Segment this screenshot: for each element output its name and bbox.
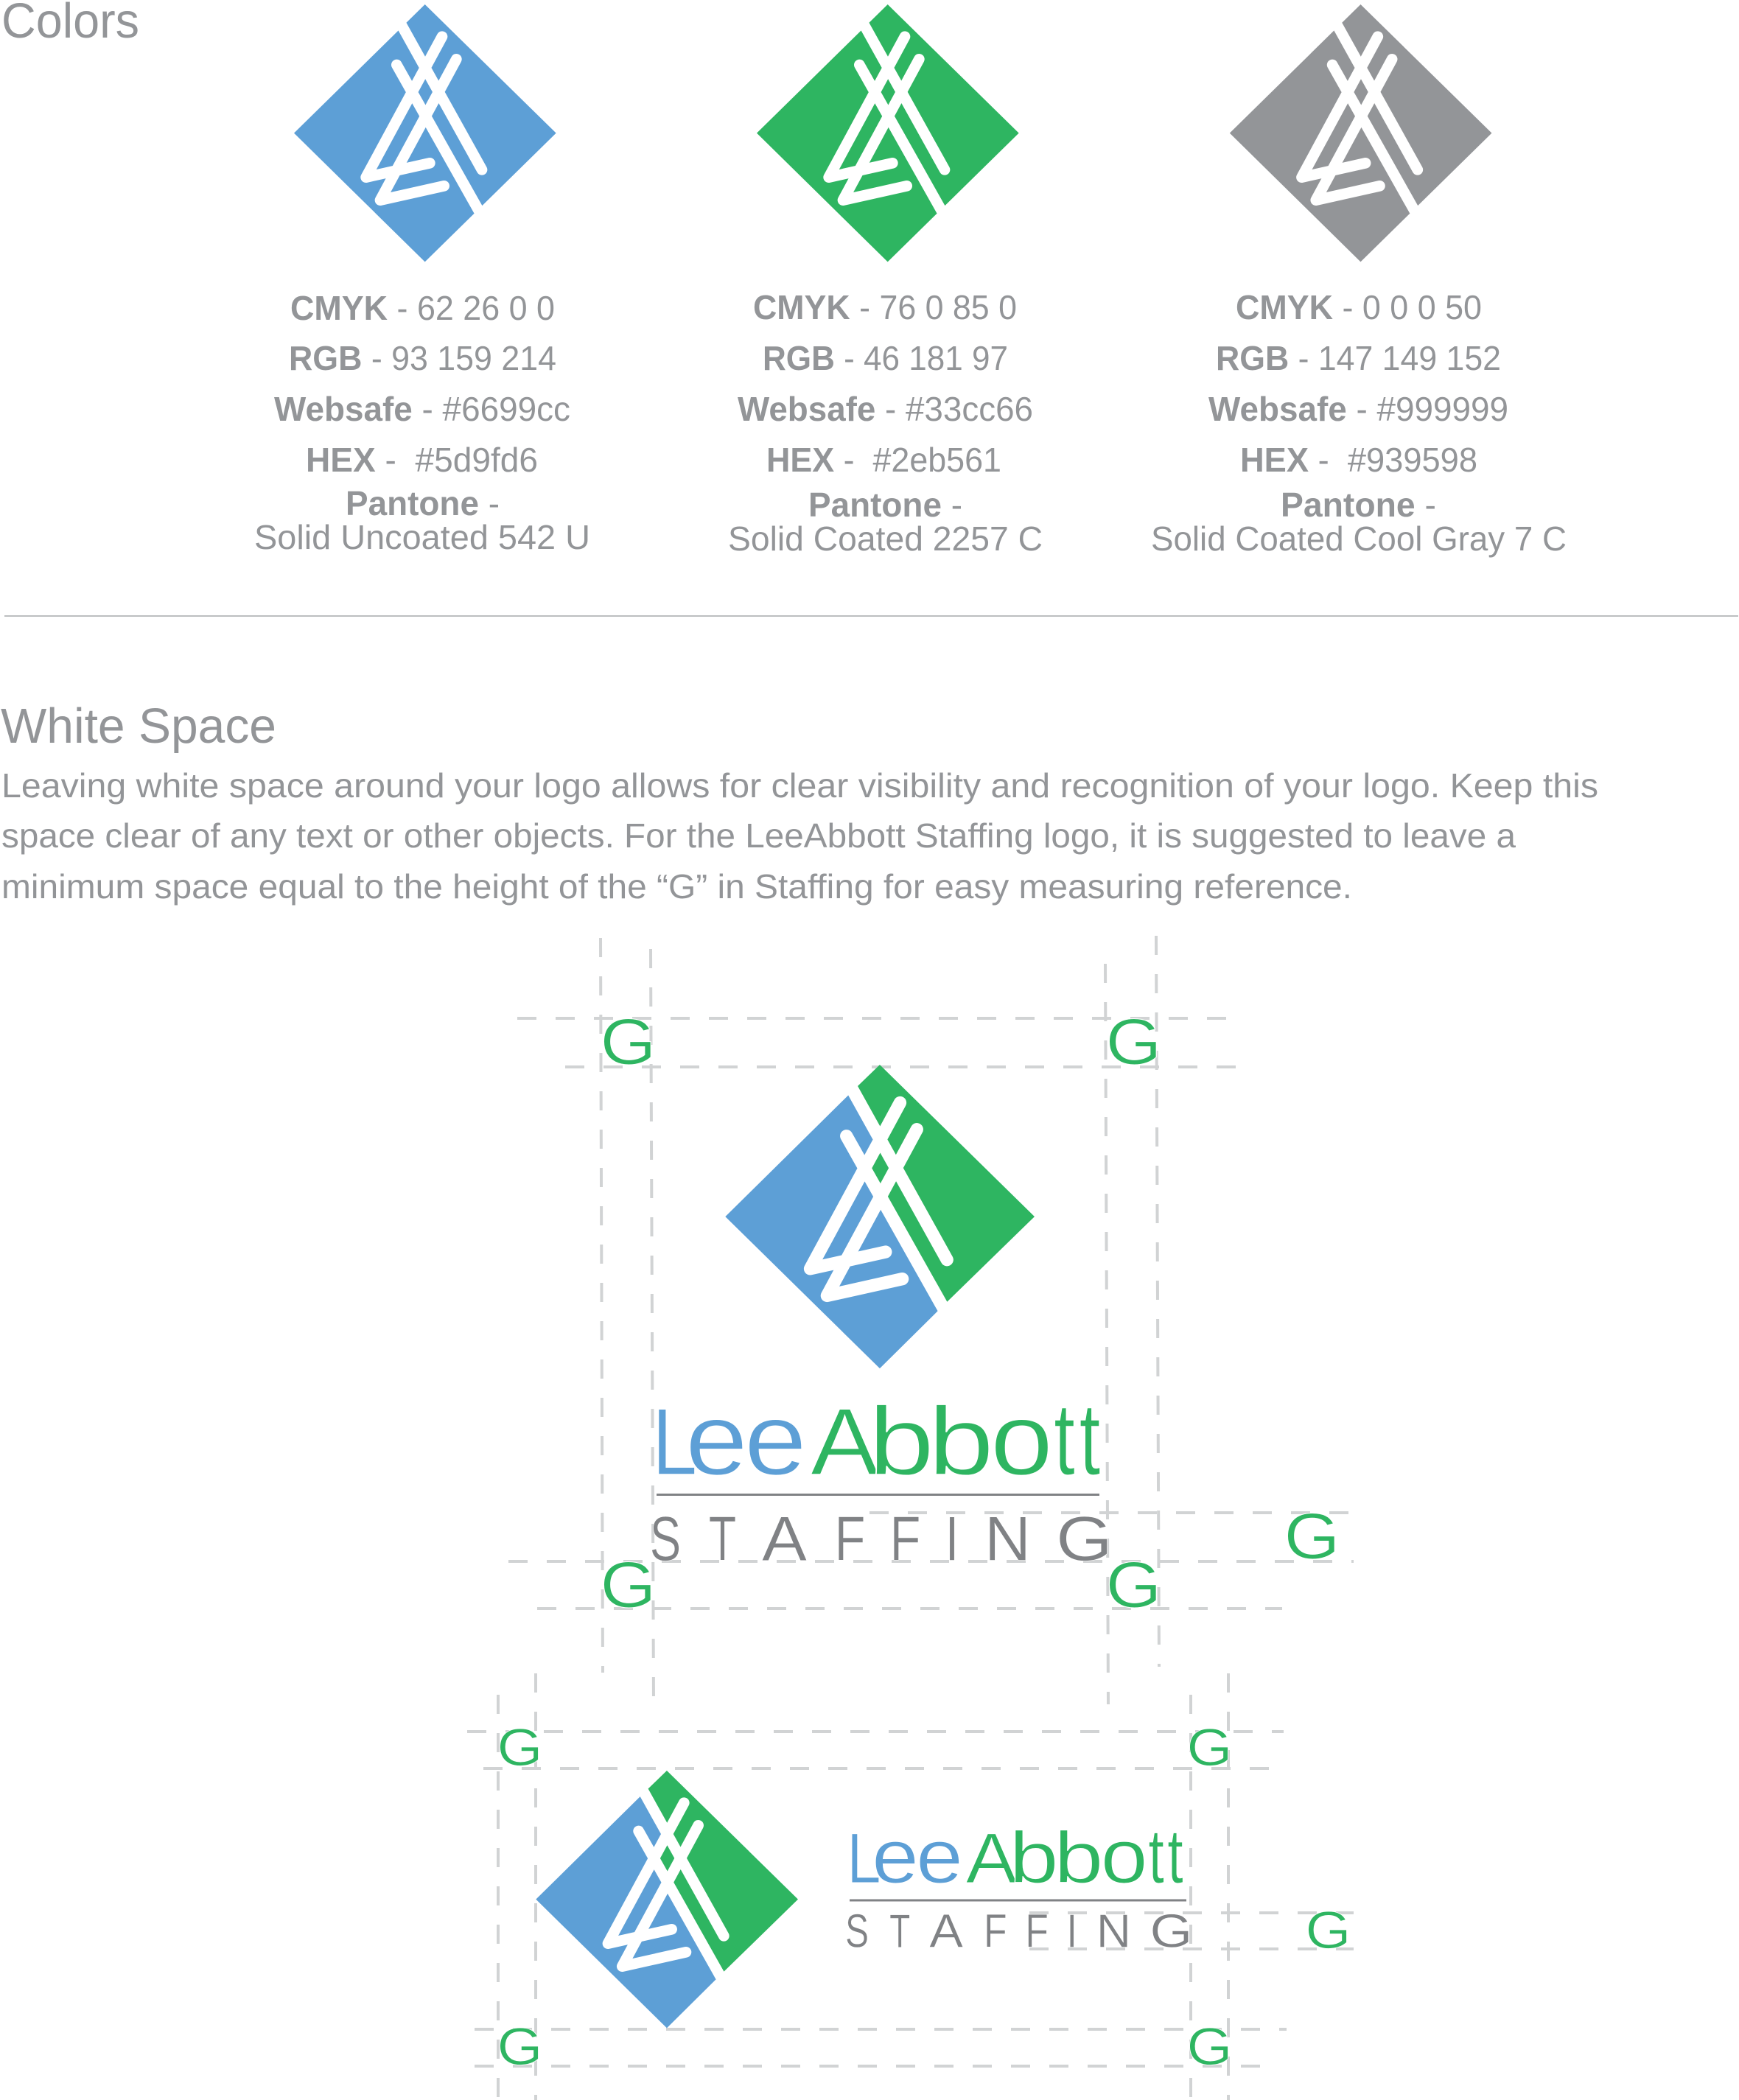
color specs: green: RGB - 46 181 97 xyxy=(763,339,1008,377)
wordmark: STAFFING xyxy=(845,1905,1192,1958)
color specs: blue: Websafe - #6699cc xyxy=(274,390,570,428)
color specs: blue: Solid Uncoated 542 U xyxy=(254,518,590,556)
color specs: blue: Pantone - xyxy=(346,484,500,522)
color specs: gray: Pantone - xyxy=(1281,486,1436,524)
wordmark: LeeAbbott: t xyxy=(1148,1813,1164,1900)
wordmark: STAFFING: I xyxy=(1067,1905,1077,1958)
wordmark: STAFFING: T xyxy=(709,1505,736,1575)
wordmark: STAFFING: N xyxy=(984,1505,1031,1575)
wordmark: STAFFING: F xyxy=(984,1905,1007,1958)
panel: vertical logo clear space diagram xyxy=(508,936,1354,1704)
clear space G markers: G xyxy=(497,2018,542,2076)
color specs: blue xyxy=(254,289,590,556)
wordmark: STAFFING: F xyxy=(890,1505,921,1575)
wordmark: STAFFING: F xyxy=(834,1505,865,1575)
color specs: gray xyxy=(1151,288,1567,558)
clear space G markers xyxy=(600,1005,1340,1621)
clear space G markers: G xyxy=(600,1548,656,1621)
panel: white space text xyxy=(1,699,1598,906)
color specs: blue: HEX - #5d9fd6 xyxy=(306,441,538,479)
wordmark: LeeAbbott: L xyxy=(847,1818,881,1898)
logo mark: blue xyxy=(294,4,556,262)
logo mark: two color xyxy=(536,1771,798,2028)
paragraph: white space explanation: Leaving white space around your logo allows for clear visibility and recognition of your logo. Keep this xyxy=(1,766,1598,805)
wordmark: LeeAbbott: t xyxy=(1079,1381,1101,1497)
color specs: green: CMYK - 76 0 85 0 xyxy=(753,288,1017,326)
panel: colors section xyxy=(1,0,1567,558)
color specs: gray: HEX - #939598 xyxy=(1240,441,1477,479)
color specs: green: HEX - #2eb561 xyxy=(766,441,1001,479)
color specs: green: Websafe - #33cc66 xyxy=(738,390,1033,428)
color specs: gray: Websafe - #999999 xyxy=(1208,390,1508,428)
wordmark: LeeAbbott: b xyxy=(1010,1817,1059,1898)
clear space G markers: G xyxy=(600,1005,656,1078)
wordmark: LeeAbbott: o xyxy=(1101,1814,1148,1900)
dashed guides xyxy=(467,1673,1354,2100)
color specs: blue: RGB - 93 159 214 xyxy=(289,339,556,377)
clear space G markers: G xyxy=(1186,2018,1232,2076)
paragraph: white space explanation xyxy=(1,766,1598,906)
color specs: green: Pantone - xyxy=(808,486,962,524)
wordmark: LeeAbbott: A xyxy=(811,1389,879,1495)
wordmark: STAFFING xyxy=(650,1505,1113,1575)
panel: horizontal logo clear space diagram xyxy=(467,1673,1354,2100)
clear space G markers: G xyxy=(1186,1719,1232,1777)
paragraph: white space explanation: space clear of any text or other objects. For the LeeAbbott Staffing logo, it is suggested to leave a xyxy=(1,816,1516,855)
wordmark: LeeAbbott: A xyxy=(966,1818,1018,1898)
wordmark: LeeAbbott xyxy=(847,1813,1183,1900)
clear space G markers: G xyxy=(1284,1499,1340,1572)
color specs: gray: CMYK - 0 0 0 50 xyxy=(1236,288,1482,326)
wordmark: STAFFING: I xyxy=(945,1505,959,1575)
logo mark: gray xyxy=(1230,4,1491,262)
dashed guides xyxy=(508,936,1354,1704)
color specs: green: Solid Coated 2257 C xyxy=(728,519,1043,558)
wordmark: LeeAbbott: t xyxy=(1054,1381,1075,1497)
clear space G markers: G xyxy=(1306,1902,1351,1960)
clear space G markers: G xyxy=(497,1719,542,1777)
color specs: gray: Solid Coated Cool Gray 7 C xyxy=(1151,519,1567,558)
heading: White Space: White Space xyxy=(1,699,276,754)
wordmark: LeeAbbott: o xyxy=(990,1382,1053,1497)
color specs: blue: CMYK - 62 26 0 0 xyxy=(290,289,555,327)
wordmark: STAFFING: T xyxy=(889,1905,910,1958)
wordmark: LeeAbbott: b xyxy=(1054,1817,1104,1898)
wordmark: LeeAbbott: e xyxy=(744,1382,807,1497)
wordmark: STAFFING: G xyxy=(1056,1505,1113,1575)
logo mark: green xyxy=(757,4,1019,262)
wordmark: STAFFING: G xyxy=(1150,1905,1192,1958)
wordmark: LeeAbbott xyxy=(651,1381,1101,1497)
logo mark: two color xyxy=(725,1065,1035,1368)
wordmark: STAFFING: F xyxy=(1025,1905,1049,1958)
wordmark: STAFFING: N xyxy=(1096,1905,1131,1958)
wordmark: STAFFING: S xyxy=(650,1505,681,1575)
wordmark: LeeAbbott: L xyxy=(651,1389,697,1495)
clear space G markers: G xyxy=(1105,1005,1161,1078)
wordmark: STAFFING: A xyxy=(762,1505,807,1575)
wordmark: LeeAbbott: b xyxy=(928,1387,994,1495)
wordmark: LeeAbbott: e xyxy=(916,1814,963,1900)
wordmark: LeeAbbott: e xyxy=(685,1382,748,1497)
clear space G markers: G xyxy=(1105,1548,1161,1621)
paragraph: white space explanation: minimum space equal to the height of the “G” in Staffing for easy measuring reference. xyxy=(1,867,1352,906)
wordmark: LeeAbbott: e xyxy=(872,1814,919,1900)
wordmark: STAFFING: S xyxy=(845,1905,869,1958)
color specs: gray: RGB - 147 149 152 xyxy=(1216,339,1501,377)
clear space G markers xyxy=(497,1719,1351,2076)
wordmark: LeeAbbott: t xyxy=(1167,1813,1183,1900)
wordmark: LeeAbbott: b xyxy=(868,1387,934,1495)
wordmark: STAFFING: A xyxy=(929,1905,964,1958)
color specs: green xyxy=(728,288,1043,558)
